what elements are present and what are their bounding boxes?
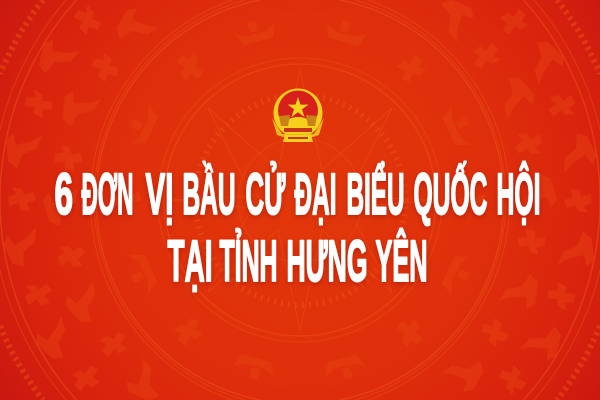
- title line 1: BIỂU: [346, 162, 404, 227]
- star rays: [170, 70, 430, 330]
- title: [54, 162, 540, 294]
- title line 2: HƯNG: [286, 229, 368, 294]
- icon: national emblem: [272, 88, 324, 142]
- title line 1: ĐẠI: [294, 162, 336, 227]
- title line 1: BẦU: [182, 162, 236, 227]
- title: YÊN: [376, 229, 428, 294]
- title line 2: TẠI: [168, 229, 212, 294]
- title line 1: ĐƠN: [82, 162, 134, 227]
- infographic cover: HỘI: [496, 162, 540, 227]
- title line 2: [168, 229, 428, 294]
- title line 1: [54, 162, 540, 227]
- title line 2: TỈNH: [220, 229, 278, 294]
- title line 1: 6: [54, 162, 73, 227]
- title line 1: VỊ: [146, 162, 174, 227]
- title line 1: QUỐC: [414, 162, 488, 227]
- title line 1: CỬ: [246, 162, 286, 227]
